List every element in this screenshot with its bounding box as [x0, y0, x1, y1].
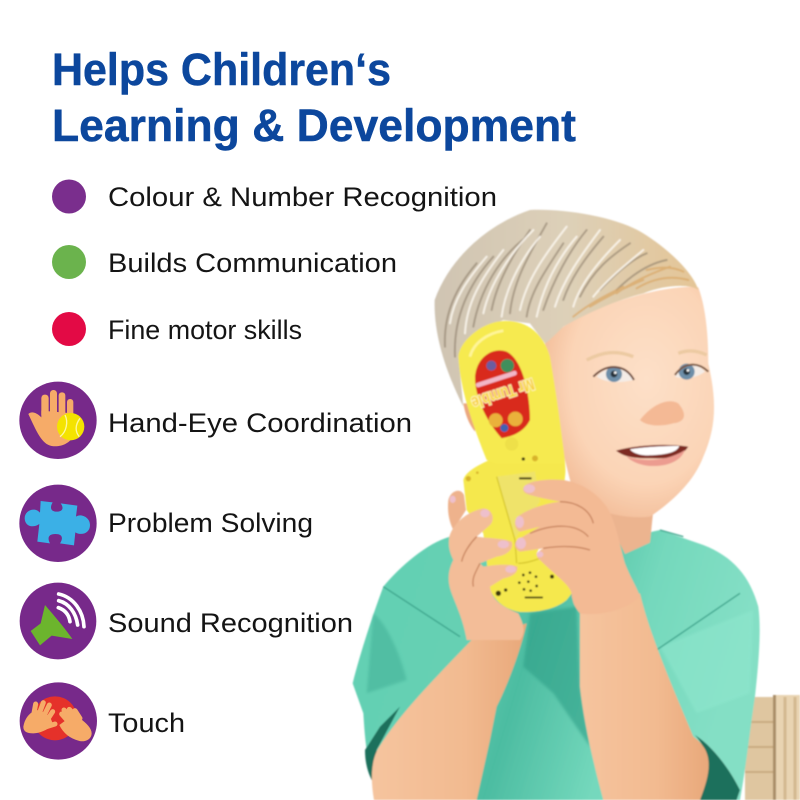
- back finger of left hand: [448, 491, 466, 530]
- item: hand-eye coordination: Hand-Eye Coordination: [108, 408, 412, 438]
- illustration: boy holding toy phone: [353, 210, 800, 800]
- right hand: [515, 480, 640, 614]
- phone upper flip: [458, 321, 565, 463]
- item: hand-eye coordination: [19, 382, 412, 459]
- icon: speaker with sound waves: [20, 583, 96, 659]
- title: Learning & Development: [52, 100, 576, 151]
- red oval label: [475, 350, 530, 438]
- hands: [448, 480, 640, 640]
- neck: [563, 450, 653, 554]
- fingernails: [450, 484, 543, 573]
- icon: hands on red circle: [20, 682, 97, 760]
- left hand: [449, 508, 524, 640]
- bullet list: colour and number recognition: Colour & Number Recognition: [108, 182, 497, 212]
- nose: [640, 401, 684, 426]
- t-shirt: [353, 530, 760, 800]
- left eye: [593, 366, 634, 382]
- item: problem solving: Problem Solving: [108, 508, 313, 538]
- title: [52, 44, 576, 151]
- toy phone: [458, 321, 578, 612]
- title: Helps Children‘s: [52, 44, 391, 95]
- item: sound recognition: [20, 583, 353, 659]
- bullet list: fine motor skills: [52, 312, 302, 346]
- bullet list: fine motor skills: Fine motor skills: [108, 315, 302, 345]
- mouth: [616, 445, 688, 466]
- item: sound recognition: Sound Recognition: [108, 608, 353, 638]
- icon: hand and ball: [19, 382, 97, 459]
- bullet list: builds communication: [52, 245, 397, 279]
- right eye: [675, 364, 708, 380]
- arms: [372, 593, 709, 800]
- wooden block: [745, 695, 800, 800]
- ear: [463, 403, 477, 432]
- phone lower body: [463, 427, 578, 612]
- hair: [435, 210, 698, 407]
- icon: puzzle piece: [19, 485, 97, 562]
- item: touch: Touch: [108, 708, 185, 738]
- phone logo: Mr Tumble: [469, 374, 537, 413]
- bullet list: builds communication: Builds Communication: [108, 248, 397, 278]
- eyebrows: [587, 351, 707, 360]
- hinge: [505, 437, 518, 451]
- item: problem solving: [19, 485, 313, 562]
- face: [463, 287, 714, 517]
- phone lower details: [466, 455, 568, 598]
- item: touch: [20, 682, 185, 760]
